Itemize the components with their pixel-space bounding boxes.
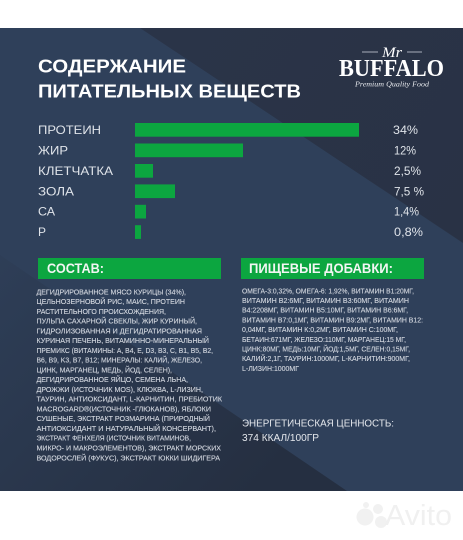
text block: additives: 0,04МГ, ВИТАМИН К:0,2МГ, ВИТАМИН С:100МГ, xyxy=(242,325,398,334)
text block: composition: B6, B9, K3, B7, B12; МИНЕРАЛЫ: КАЛИЙ, ЖЕЛЕЗО, xyxy=(36,356,202,365)
bar chart: nutrients xyxy=(38,123,424,239)
text block: additives: ЦИНК:80МГ, МЕДЬ:10МГ, ЙОД:1,5МГ, СЕЛЕН:0,15МГ, xyxy=(242,344,410,354)
title: СОДЕРЖАНИЕ xyxy=(38,56,186,76)
text block: energy value: ЭНЕРГЕТИЧЕСКАЯ ЦЕННОСТЬ: xyxy=(242,418,394,430)
heading: food additives: ПИЩЕВЫЕ ДОБАВКИ: xyxy=(249,261,393,276)
text block: composition: СУШЕНЫЕ, ЭКСТРАКТ РОЗМАРИНА (ПРИРОДНЫЙ xyxy=(36,414,210,423)
text block: additives: ВИТАМИН В2:6МГ, ВИТАМИН В3:60МГ, ВИТАМИН xyxy=(242,296,409,305)
row: phosphorus: Р xyxy=(38,225,46,239)
logo: Mr Buffalo: Mr xyxy=(381,45,402,61)
row: protein: ПРОТЕИН xyxy=(38,123,101,137)
text block: composition: ЦЕЛЬНОЗЕРНОВОЙ РИС, МАИС, ПРОТЕИН xyxy=(36,297,185,306)
watermark: Avito xyxy=(356,500,452,532)
text block: composition: ГИДРОЛИЗОВАННАЯ И ДЕГИДРАТИРОВАННАЯ xyxy=(36,326,202,335)
text block: additives xyxy=(242,286,423,373)
text block: composition: ДЕГИДРИРОВАННОЕ ЯЙЦО, СЕМЕНА ЛЬНА, xyxy=(36,375,188,384)
row: phosphorus: 0,8% xyxy=(394,225,423,239)
text block: composition: ДЕГИДРИРОВАННОЕ МЯСО КУРИЦЫ (34%), xyxy=(36,287,186,296)
watermark: Avito: Avito xyxy=(385,500,452,532)
row: calcium: 1,4% xyxy=(394,204,419,218)
text block: additives: ВИТАМИН В7:0,1МГ, ВИТАМИН В9:2МГ, ВИТАМИН В12: xyxy=(242,315,423,324)
text block: additives: L-ЛИЗИН:1000МГ xyxy=(242,364,299,373)
text block: additives: В4:2208МГ, ВИТАМИН В5:10МГ, ВИТАМИН В6:6МГ, xyxy=(242,306,408,315)
text block: energy value: 374 ККАЛ/100ГР xyxy=(242,432,319,444)
logo: Mr Buffalo: BUFFALO xyxy=(339,55,444,82)
text block: energy value xyxy=(242,418,394,444)
text block: composition xyxy=(36,287,223,462)
text block: composition: ЭКСТРАКТ ФЕНХЕЛЯ (ИСТОЧНИК ВИТАМИНОВ, xyxy=(36,434,191,443)
row: ash: ЗОЛА xyxy=(38,184,74,198)
heading: food additives xyxy=(241,258,424,279)
row: ash: 7,5 % xyxy=(394,184,424,198)
text block: additives: ОМЕГА-3:0,32%, ОМЕГА-6: 1,92%, ВИТАМИН В1:20МГ, xyxy=(242,286,414,295)
text block: additives: КАЛИЙ:2,1Г, ТАУРИН:1000МГ, L-КАРНИТИН:900МГ, xyxy=(242,354,410,363)
text block: additives: БЕТАИН:671МГ, ЖЕЛЕЗО:110МГ, МАРГАНЕЦ:15 МГ, xyxy=(242,335,406,344)
heading: composition: СОСТАВ: xyxy=(47,261,104,276)
row: phosphorus xyxy=(38,225,423,239)
row: calcium xyxy=(38,204,419,218)
row: calcium: СА xyxy=(38,204,55,218)
text block: composition: ПУЛЬПА САХАРНОЙ СВЕКЛЫ, ЖИР КУРИНЫЙ, xyxy=(36,317,197,326)
text block: composition: МИКРО- И МАКРОЭЛЕМЕНТОВ), ЭКСТРАКТ МОРСКИХ xyxy=(36,444,221,452)
row: protein xyxy=(38,123,418,137)
text block: composition: АНТИОКСИДАНТ И НАТУРАЛЬНЫЙ КОНСЕРВАНТ), xyxy=(36,424,216,433)
row: ash xyxy=(38,184,424,198)
logo: Mr Buffalo: Premium Quality Food xyxy=(354,80,429,88)
text block: composition: ЦИНК, МАРГАНЕЦ, МЕДЬ, ЙОД, СЕЛЕН), xyxy=(36,365,172,374)
text block: composition: ПРЕМИКС (ВИТАМИНЫ: A, B4, E, D3, B3, C, B1, B5, B2, xyxy=(36,346,213,355)
row: fat xyxy=(38,144,416,158)
logo: Mr Buffalo xyxy=(339,45,444,88)
row: protein: 34% xyxy=(393,123,418,137)
text block: composition: ДРОЖЖИ (ИСТОЧНИК MOS), КЛЮКВА, L-ЛИЗИН, xyxy=(36,385,203,394)
row: fat: 12% xyxy=(394,144,416,158)
text block: composition: ВОДОРОСЛЕЙ (ФУКУС), ЭКСТРАКТ ЮККИ ШИДИГЕРА xyxy=(36,453,220,462)
row: fat: ЖИР xyxy=(38,144,68,158)
row: fiber xyxy=(38,164,421,178)
text block: composition: РАСТИТЕЛЬНОГО ПРОИСХОЖДЕНИЯ, xyxy=(36,307,166,316)
text block: composition: ТАУРИН, АНТИОКСИДАНТ, L-КАРНИТИН, ПРЕБИОТИК xyxy=(36,395,223,404)
title: ПИТАТЕЛЬНЫХ ВЕЩЕСТВ xyxy=(38,82,301,102)
row: fiber: КЛЕТЧАТКА xyxy=(38,164,113,178)
heading: composition xyxy=(38,258,221,279)
title xyxy=(38,56,301,102)
text block: composition: КУРИНАЯ ПЕЧЕНЬ, ВИТАМИННО-МИНЕРАЛЬНЫЙ xyxy=(36,336,209,345)
row: fiber: 2,5% xyxy=(394,164,421,178)
text block: composition: MACROGARD®(ИСТОЧНИК -ГЛЮКАНОВ), ЯБЛОКИ xyxy=(36,404,211,413)
